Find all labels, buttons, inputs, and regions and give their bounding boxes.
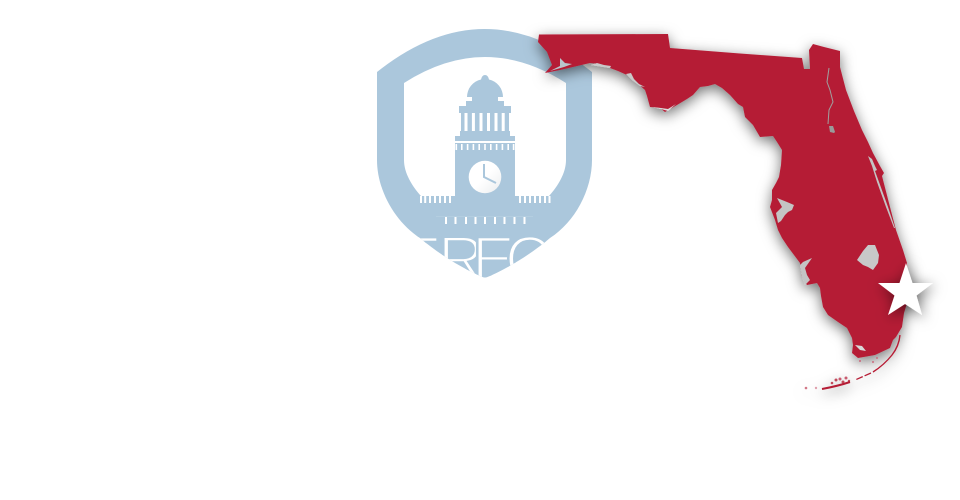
map: Florida (538, 34, 908, 389)
Pensacola Bay (550, 58, 572, 71)
clock face (469, 161, 501, 193)
Indian River Lagoon (868, 156, 895, 228)
Florida Bay flats (855, 345, 866, 351)
base windows (436, 216, 533, 224)
shield outline (377, 29, 592, 278)
tower crenellation (456, 144, 514, 150)
St Andrew Bay (626, 73, 645, 87)
St Johns River (827, 68, 833, 124)
Apalachicola Bay (652, 104, 676, 111)
Lake Okeechobee (857, 245, 879, 270)
Tampa Bay (776, 198, 794, 223)
clock tower (455, 75, 515, 204)
infographic canvas (377, 28, 938, 400)
Choctawhatchee Bay (591, 63, 611, 68)
column gaps (464, 113, 505, 131)
Charlotte Harbor (800, 258, 812, 285)
Lake George (829, 126, 835, 133)
logo: clock tower shield (377, 29, 592, 295)
location marker star (878, 263, 933, 315)
Florida Keys (805, 335, 900, 389)
building wing windows (420, 196, 550, 203)
state outline (538, 34, 908, 358)
logo wordmark: TREC (400, 223, 551, 295)
